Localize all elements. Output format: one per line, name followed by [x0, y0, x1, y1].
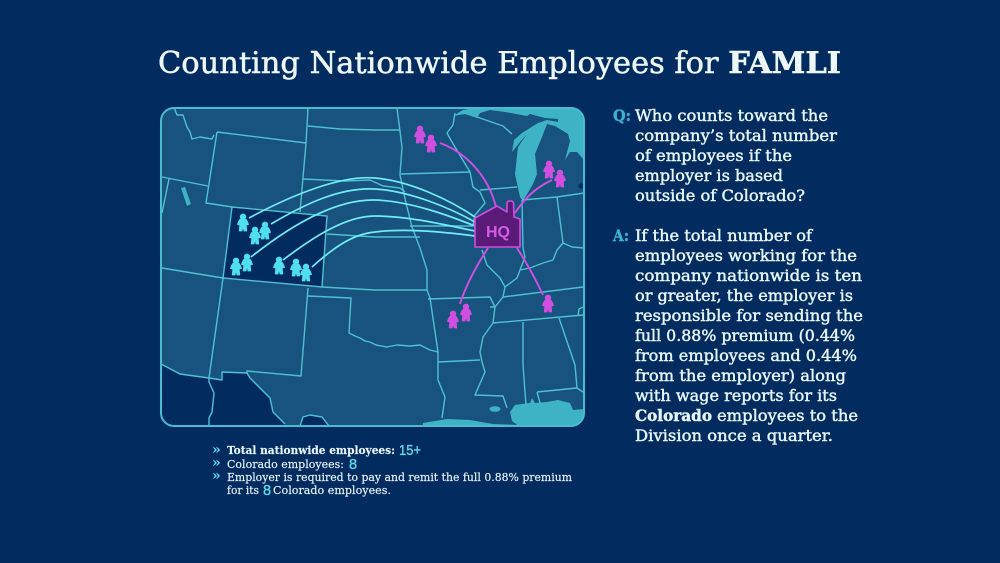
state borders [161, 108, 584, 427]
answer text: Colorado [635, 406, 712, 425]
answer text: Division once a quarter. [635, 427, 833, 445]
Colorado employee icons [230, 214, 312, 281]
answer text: If the total number of [635, 227, 813, 245]
answer text: with wage reports for its [635, 387, 837, 405]
answer text: from employees and 0.44% [635, 347, 857, 365]
title: Counting Nationwide Employees for FAMLI [158, 46, 841, 81]
bullet list [212, 442, 573, 499]
bullet list: » [212, 468, 221, 484]
bullet list: Colorado employees. [273, 484, 391, 497]
bullet list: 8 [349, 457, 357, 473]
Colorado connection lines [249, 178, 475, 267]
icon: HQ building [475, 201, 520, 247]
Great Salt Lake [181, 187, 191, 206]
question text: Who counts toward the [635, 107, 828, 125]
bullet list: Employer is required to pay and remit the full 0.88% premium [227, 471, 573, 484]
Gulf of Mexico [510, 398, 584, 427]
answer text: employees working for the [635, 247, 857, 265]
answer text: responsible for sending the [635, 307, 863, 325]
Great Lakes [453, 108, 584, 201]
bullet list: Colorado employees: [227, 458, 344, 471]
bullet list: » [212, 455, 221, 471]
answer text: full 0.88% premium (0.44% [635, 327, 855, 345]
question text: outside of Colorado? [635, 187, 805, 205]
map border [161, 108, 584, 426]
answer text: company nationwide is ten [635, 267, 862, 285]
bullet list: Total nationwide employees: [227, 444, 395, 457]
question text: Q: [613, 106, 631, 125]
answer text: A: [612, 226, 629, 245]
out-of-state employee icons [414, 126, 566, 328]
icon: HQ building: HQ [486, 224, 510, 241]
bullet list: » [212, 442, 221, 458]
question text [613, 106, 838, 205]
answer text: from the employer) along [635, 367, 846, 385]
bullet list: 8 [263, 483, 271, 499]
answer text: or greater, the employer is [635, 287, 853, 305]
Canada sliver [553, 108, 584, 121]
answer text [612, 226, 863, 445]
out-of-state connection lines [440, 143, 552, 304]
map panel [161, 108, 584, 427]
question text: employer is based [635, 167, 783, 185]
question text: company’s total number [635, 127, 838, 145]
answer text: employees to the [717, 407, 858, 425]
Colorado [223, 207, 327, 287]
Mexico [161, 364, 286, 427]
question text: of employees if the [635, 147, 792, 165]
bullet list: 15+ [399, 443, 421, 459]
bullet list: for its [227, 484, 259, 497]
